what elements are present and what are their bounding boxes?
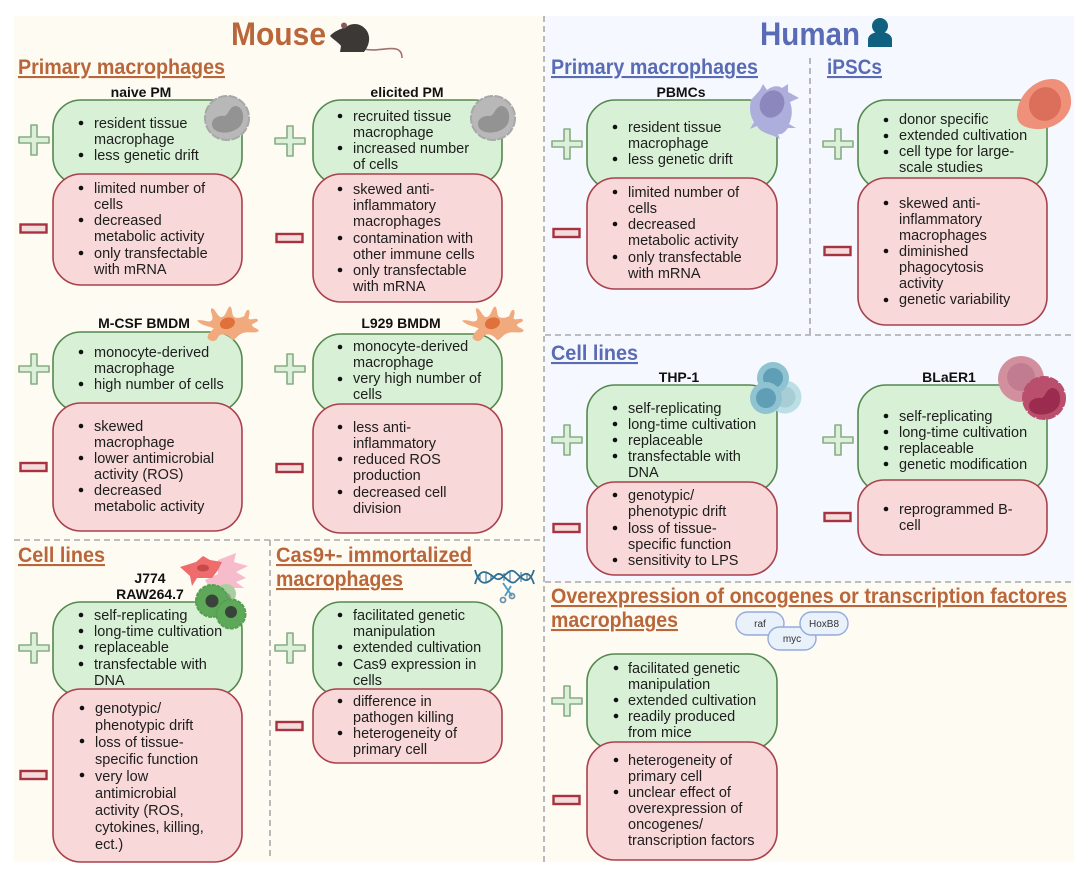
icon: plus [19,633,49,663]
advantages: L929 BMDM: monocyte-derived [353,339,468,355]
disadvantages: J774 RAW264.7: antimicrobial [95,786,176,802]
icon: DNA and scissors [475,570,534,602]
disadvantages: J774 RAW264.7: cytokines, killing, [95,820,204,836]
disadvantages: elicited PM: inflammatory [353,198,437,214]
advantages: elicited PM: macrophage [353,125,434,141]
icon: mouse [330,22,402,58]
advantages: Cas9: extended cultivation [353,640,481,656]
label: J774 RAW264.7: J774 [134,570,166,586]
disadvantages: PBMCs: decreased [628,217,696,233]
icon: plus [823,425,853,455]
disadvantages: THP-1: sensitivity to LPS [628,553,738,569]
disadvantages: M-CSF BMDM: activity (ROS) [94,467,183,483]
card: iPSCs [823,79,1071,325]
disadvantages: Cas9: primary cell [353,742,427,758]
background: mouse panel [14,16,544,862]
disadvantages: J774 RAW264.7: loss of tissue- [95,735,184,751]
disadvantages: naive PM: with mRNA [93,262,167,278]
disadvantages: naive PM: metabolic activity [94,229,205,245]
disadvantages: J774 RAW264.7: phenotypic drift [95,718,193,734]
advantages: iPSCs: extended cultivation [899,128,1027,144]
disadvantages: BLaER1: reprogrammed B- [899,502,1013,518]
icon: minus [554,229,580,237]
icon: plus [552,425,582,455]
advantages: L929 BMDM: very high number of [353,371,482,387]
advantages: elicited PM [313,100,502,185]
protein: myc: myc [783,634,801,645]
advantages: iPSCs: cell type for large- [899,144,1014,160]
disadvantages: PBMCs: with mRNA [627,266,701,282]
icon: plus [19,125,49,155]
advantages: overexpression [587,654,777,750]
icon: minus [276,234,302,242]
label: BLaER1: BLaER1 [922,369,976,385]
background: overexpression panel [545,582,1074,862]
advantages: M-CSF BMDM: high number of cells [94,377,224,393]
label: naive PM: naive PM [111,84,171,100]
icon: minus [824,513,850,521]
icon: plus [552,686,582,716]
card: elicited PM [275,84,515,302]
card: Cas9 [275,570,534,763]
disadvantages: elicited PM: with mRNA [352,279,426,295]
icon: minus [20,463,46,471]
card: THP-1 [552,362,802,575]
card: J774 RAW264.7 [19,553,248,862]
disadvantages: M-CSF BMDM [53,403,242,531]
icon: macrophage [471,96,515,140]
advantages: M-CSF BMDM [53,332,242,412]
icon: plus [552,129,582,159]
disadvantages: overexpression: overexpression of [628,801,743,817]
label: L929 BMDM: L929 BMDM [361,315,441,331]
disadvantages: overexpression: primary cell [628,769,702,785]
advantages: Cas9: cells [353,673,382,689]
advantages: BLaER1: self-replicating [899,409,992,425]
disadvantages: THP-1: specific function [628,537,731,553]
advantages: J774 RAW264.7 [53,602,242,696]
disadvantages: Cas9: pathogen killing [353,710,454,726]
disadvantages: L929 BMDM: inflammatory [353,436,437,452]
advantages: Cas9 [313,602,502,696]
heading: Cas9 immortalized macrophages [276,544,472,591]
card: L929 BMDM [275,307,524,533]
icon: stem cell [1017,79,1071,129]
advantages: BLaER1: genetic modification [899,457,1027,473]
advantages: THP-1: long-time cultivation [628,417,756,433]
disadvantages: iPSCs: skewed anti- [899,196,981,212]
icon: plus [19,354,49,384]
heading: mouse cell lines: Cell lines [18,544,105,567]
advantages: naive PM [53,100,242,185]
disadvantages: J774 RAW264.7: very low [95,769,149,785]
heading: overexpression of oncogenes or transcription factors: macrophages [551,609,678,632]
advantages: J774 RAW264.7: DNA [94,673,125,689]
icon: macrophage [462,307,524,341]
disadvantages: BLaER1: cell [899,518,921,534]
disadvantages: elicited PM: only transfectable [353,263,467,279]
disadvantages: elicited PM: other immune cells [353,247,475,263]
disadvantages: L929 BMDM: reduced ROS [353,452,441,468]
icon: plus [275,354,305,384]
disadvantages: iPSCs [858,178,1047,325]
icon: minus [276,464,302,472]
advantages: naive PM: less genetic drift [94,148,199,164]
advantages: overexpression: facilitated genetic [628,661,740,677]
disadvantages: M-CSF BMDM: decreased [94,483,162,499]
advantages: Cas9: facilitated genetic [353,608,465,624]
advantages: L929 BMDM [313,334,502,414]
advantages: overexpression: extended cultivation [628,693,756,709]
protein: raf: raf [754,619,766,630]
icon: plus [823,129,853,159]
advantages: BLaER1: replaceable [899,441,974,457]
advantages: M-CSF BMDM: macrophage [94,361,175,377]
disadvantages: PBMCs [587,178,777,289]
background: human panel [545,16,1074,582]
disadvantages: PBMCs: only transfectable [628,250,742,266]
label: elicited PM: elicited PM [370,84,444,100]
title: Mouse [231,16,402,58]
title: Human: Human [760,16,860,52]
advantages: overexpression: readily produced [628,709,735,725]
advantages: naive PM: resident tissue [94,116,188,132]
disadvantages: overexpression: heterogeneity of [628,753,733,769]
disadvantages: M-CSF BMDM: macrophage [94,435,175,451]
disadvantages: THP-1: phenotypic drift [628,504,726,520]
icon: person [868,18,892,47]
disadvantages: overexpression: transcription factors [628,833,755,849]
advantages: THP-1 [587,385,777,493]
disadvantages: J774 RAW264.7 [53,689,242,862]
disadvantages: L929 BMDM: division [353,501,401,517]
advantages: J774 RAW264.7: replaceable [94,640,169,656]
protein: HoxB8: HoxB8 [809,619,839,630]
disadvantages: iPSCs: activity [899,276,944,292]
advantages: PBMCs: macrophage [628,136,709,152]
advantages: elicited PM: recruited tissue [353,109,451,125]
disadvantages: PBMCs: metabolic activity [628,233,739,249]
heading: mouse primary macrophages: Primary macrophages [18,56,225,79]
disadvantages: L929 BMDM: decreased cell [353,485,446,501]
disadvantages: J774 RAW264.7: genotypic/ [95,701,162,717]
disadvantages: naive PM [53,174,242,285]
heading: Cas9 immortalized macrophages: Cas9+- immortalized [276,544,472,567]
disadvantages: iPSCs: macrophages [899,228,987,244]
disadvantages: M-CSF BMDM: lower antimicrobial [94,451,214,467]
disadvantages: J774 RAW264.7: activity (ROS, [95,803,184,819]
disadvantages: PBMCs: cells [628,201,657,217]
advantages: PBMCs: resident tissue [628,120,722,136]
card: M-CSF BMDM [19,307,259,531]
disadvantages: THP-1 [587,482,777,575]
icon: monocyte [750,84,799,139]
advantages: naive PM: macrophage [94,132,175,148]
advantages: overexpression: manipulation [628,677,710,693]
disadvantages: overexpression [587,742,777,860]
advantages: elicited PM: of cells [353,157,398,173]
disadvantages: iPSCs: genetic variability [899,292,1011,308]
advantages: PBMCs: less genetic drift [628,152,733,168]
icon: minus [20,771,46,779]
advantages: J774 RAW264.7: long-time cultivation [94,624,222,640]
advantages: BLaER1: long-time cultivation [899,425,1027,441]
advantages: elicited PM: increased number [353,141,469,157]
advantages: THP-1: transfectable with [628,449,741,465]
disadvantages: naive PM: limited number of [94,181,206,197]
advantages: Cas9: Cas9 expression in [353,657,476,673]
disadvantages: J774 RAW264.7: ect.) [95,837,123,853]
icon: macrophage [197,307,259,341]
icon: plus [275,126,305,156]
heading: human primary macrophages: Primary macrophages [551,56,758,79]
advantages: overexpression: from mice [628,725,692,741]
advantages: PBMCs [587,100,777,190]
advantages: THP-1: replaceable [628,433,703,449]
disadvantages: elicited PM [313,174,502,302]
advantages: BLaER1 [858,385,1047,493]
disadvantages: J774 RAW264.7: specific function [95,752,198,768]
label: THP-1: THP-1 [659,369,699,385]
disadvantages: BLaER1 [858,480,1047,555]
disadvantages: elicited PM: skewed anti- [353,182,435,198]
disadvantages: overexpression: unclear effect of [628,785,732,801]
disadvantages: THP-1: loss of tissue- [628,521,717,537]
disadvantages: M-CSF BMDM: skewed [94,419,143,435]
icon: minus [824,247,850,255]
advantages: L929 BMDM: cells [353,387,382,403]
disadvantages: Cas9: difference in [353,694,432,710]
icon: macrophage [205,96,249,140]
card: naive PM [19,84,249,285]
advantages: THP-1: self-replicating [628,401,722,417]
heading: overexpression of oncogenes or transcription factors [551,585,1067,632]
advantages: Cas9: manipulation [353,624,435,640]
disadvantages: iPSCs: diminished [899,244,968,260]
disadvantages: L929 BMDM: production [353,468,421,484]
disadvantages: naive PM: cells [94,197,123,213]
disadvantages: THP-1: genotypic/ [628,488,695,504]
icon: plus [275,633,305,663]
advantages: THP-1: DNA [628,465,659,481]
advantages: iPSCs: scale studies [899,160,983,176]
advantages: J774 RAW264.7: transfectable with [94,657,207,673]
disadvantages: elicited PM: contamination with [353,231,473,247]
icon: minus [276,722,302,730]
disadvantages: overexpression: oncogenes/ [628,817,704,833]
icon: minus [554,796,580,804]
heading: Cas9 immortalized macrophages: macrophages [276,568,403,591]
card: overexpression [552,654,777,860]
card: PBMCs [552,84,799,289]
advantages: iPSCs: donor specific [899,112,988,128]
disadvantages: elicited PM: macrophages [353,214,441,230]
label: RAW264.7: RAW264.7 [116,586,184,602]
advantages: iPSCs [858,100,1047,190]
title: Mouse: Mouse [231,16,326,52]
advantages: M-CSF BMDM: monocyte-derived [94,345,209,361]
icon: minus [554,524,580,532]
disadvantages: M-CSF BMDM: metabolic activity [94,499,205,515]
advantages: L929 BMDM: macrophage [353,355,434,371]
icon: BLaER1 cells [998,356,1065,419]
disadvantages: Cas9: heterogeneity of [353,726,458,742]
icon: THP-1 cells [750,362,802,414]
card: BLaER1 [823,356,1065,555]
disadvantages: naive PM: only transfectable [94,246,208,262]
icon: cell line cells [180,553,248,628]
icon: minus [20,224,46,232]
label: PBMCs: PBMCs [656,84,706,100]
disadvantages: iPSCs: phagocytosis [899,260,984,276]
label: M-CSF BMDM: M-CSF BMDM [98,315,190,331]
disadvantages: L929 BMDM: less anti- [353,420,411,436]
disadvantages: iPSCs: inflammatory [899,212,983,228]
disadvantages: PBMCs: limited number of [628,185,740,201]
disadvantages: Cas9 [313,689,502,763]
disadvantages: naive PM: decreased [94,213,162,229]
heading: iPSCs: iPSCs [827,56,882,79]
heading: human cell lines: Cell lines [551,342,638,365]
advantages: J774 RAW264.7: self-replicating [94,608,188,624]
disadvantages: L929 BMDM [313,404,502,533]
icon: protein labels raf myc HoxB8 [736,612,848,650]
